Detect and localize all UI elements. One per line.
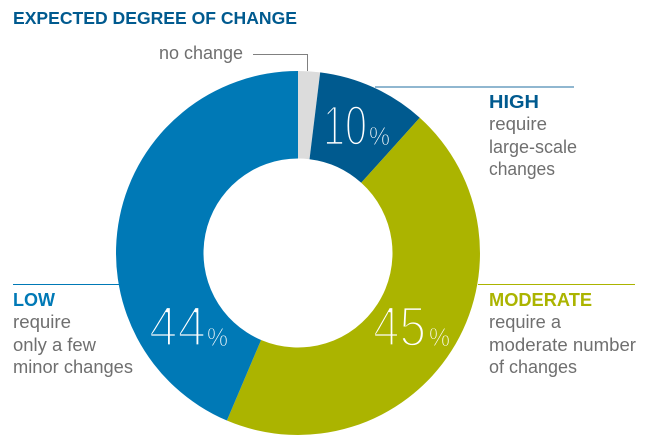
callout: moderate: moderate number — [489, 335, 636, 355]
callout: low: require — [13, 312, 71, 332]
value: low 44%: % — [207, 322, 228, 352]
leader line: high — [375, 86, 574, 88]
title: EXPECTED DEGREE OF CHANGE — [13, 8, 297, 28]
callout: low — [13, 290, 133, 377]
segment: moderate — [227, 118, 480, 435]
label: no change: no change — [159, 43, 243, 63]
callout: low: minor changes — [13, 357, 133, 377]
callout: moderate: MODERATE — [489, 290, 592, 310]
donut chart — [116, 71, 480, 435]
value: high 10%: 10 — [323, 94, 367, 158]
leader line: no change — [253, 54, 308, 71]
callout: high: HIGH — [489, 92, 539, 112]
callout: moderate: of changes — [489, 357, 577, 377]
callout: high — [489, 92, 577, 179]
segment: no change — [298, 71, 320, 159]
callout: high: large-scale — [489, 137, 577, 157]
callout: high: changes — [489, 159, 555, 179]
value: low 44%: 44 — [149, 295, 206, 359]
value: moderate 45%: 45 — [373, 295, 426, 359]
callout: moderate: require a — [489, 312, 562, 332]
callout: high: require — [489, 114, 547, 134]
value: moderate 45%: % — [429, 322, 450, 352]
leader line: moderate — [478, 284, 635, 286]
callout: moderate — [489, 290, 636, 377]
segment: low — [116, 71, 298, 421]
callout: low: only a few — [13, 335, 97, 355]
leader line: low — [13, 284, 120, 286]
value: high 10%: % — [369, 121, 390, 151]
callout: low: LOW — [13, 290, 55, 310]
segment: high — [310, 72, 420, 183]
